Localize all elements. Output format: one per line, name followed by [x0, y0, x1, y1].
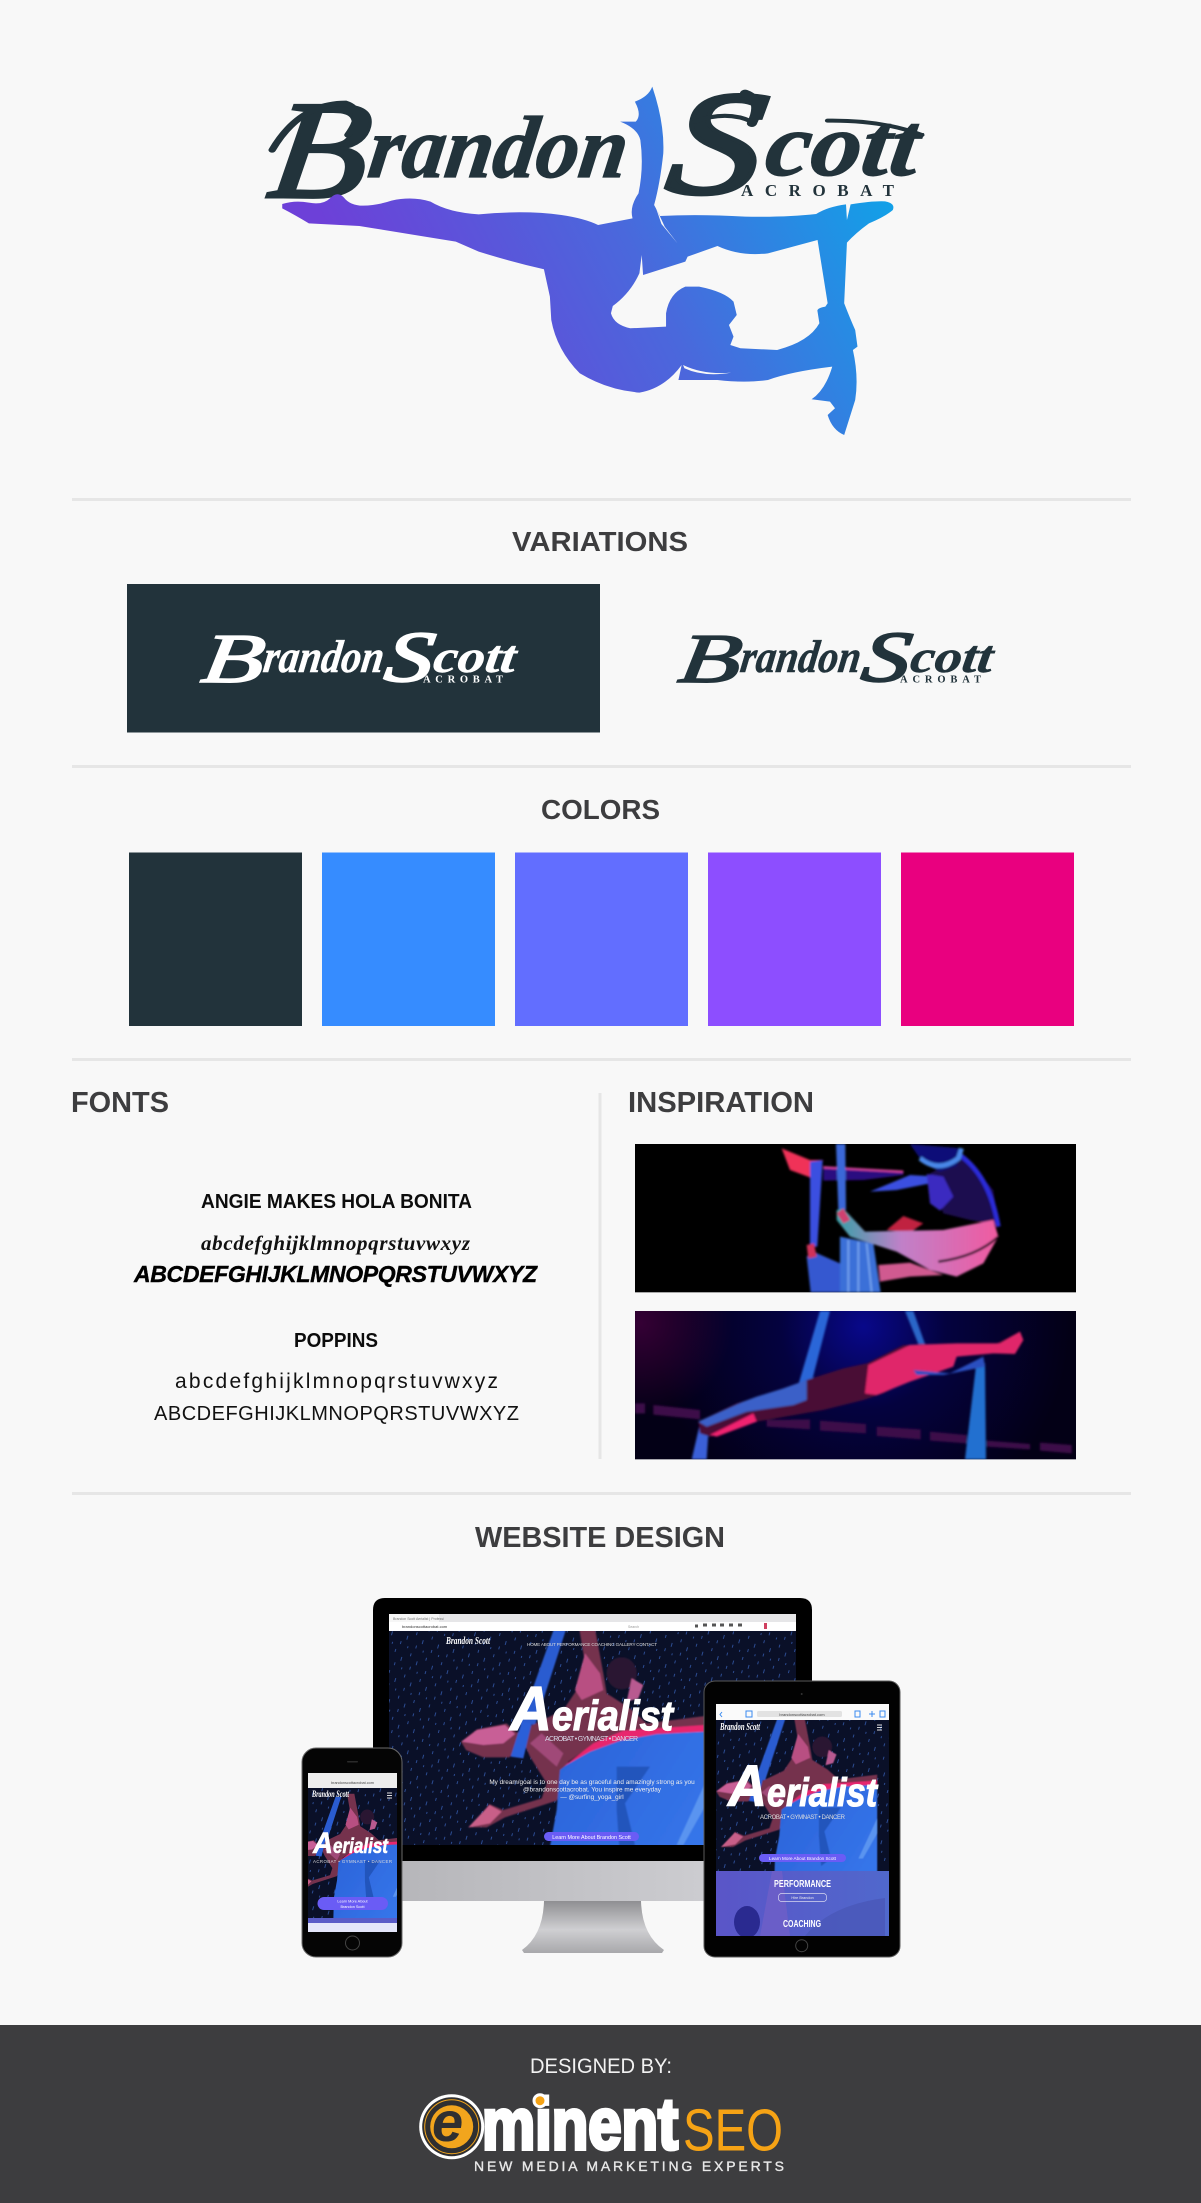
- tablet button: [759, 1854, 846, 1862]
- reversed wordmark: randon: [261, 631, 388, 682]
- tablet site logo: Brandon Scott: [719, 1722, 761, 1733]
- call to action button: [544, 1832, 639, 1841]
- reversed wordmark: B: [197, 620, 270, 698]
- Poppins lowercase sample: abcdefghijklmnopqrstuvwxyz: [175, 1370, 498, 1393]
- hero subtitle: ACROBAT • GYMNAST • DANCER: [545, 1736, 638, 1743]
- divider: [72, 1058, 1131, 1061]
- phone hero title: A: [312, 1827, 333, 1860]
- website hero: Learn More About Brandon Scott: [552, 1835, 631, 1841]
- tablet services section: [716, 1871, 889, 1938]
- logo orange dot: [532, 2093, 548, 2108]
- tablet: brandonscottacrobat.com: [779, 1712, 825, 1717]
- script lowercase sample: abcdefghijklmnopqrstuvwxyz: [201, 1231, 471, 1255]
- reversed tagline: ACROBAT: [423, 674, 503, 686]
- divider: [72, 1492, 1131, 1495]
- phone address bar: brandonscottacrobat.com: [331, 1781, 374, 1785]
- panel: fonts: [71, 1087, 538, 1425]
- browser chrome: brandonscottacrobat.com: [402, 1624, 448, 1629]
- panel: inspiration: [628, 1087, 1076, 1459]
- heading: fonts: FONTS: [71, 1087, 169, 1119]
- browser chrome: [389, 1614, 796, 1631]
- hero title: A: [508, 1675, 552, 1744]
- colour swatches: [129, 852, 1074, 1026]
- reversed wordmark: cott: [431, 631, 521, 682]
- site logo: Brandon Scott: [445, 1635, 491, 1647]
- hero title: erialist: [552, 1692, 675, 1739]
- tablet hero title: A: [726, 1754, 767, 1819]
- phone: [302, 1748, 402, 1958]
- phone home button: [346, 1936, 360, 1950]
- heading: inspiration: INSPIRATION: [628, 1087, 814, 1119]
- designer logo: [419, 2085, 784, 2174]
- coaching heading: COACHING: [783, 1919, 821, 1930]
- phone site logo: Brandon Scott: [311, 1789, 349, 1799]
- Poppins uppercase sample: ABCDEFGHIJKLMNOPQRSTUVWXYZ: [154, 1403, 519, 1425]
- logo wordmark: Scott: S: [659, 62, 776, 226]
- monitor chin: [373, 1858, 812, 1901]
- heading: variations: VARIATIONS: [512, 526, 688, 557]
- logo wordmark: e: [432, 2090, 463, 2153]
- designed by label: DESIGNED BY:: [530, 2055, 672, 2078]
- browser chrome: Brandon Scott Aerialist | Professi: [393, 1617, 444, 1621]
- tablet services section: Hire Brandon: [791, 1896, 814, 1900]
- footer: [0, 2025, 1201, 2203]
- phone toolbar: [308, 1918, 397, 1923]
- dark wordmark: B: [674, 620, 747, 698]
- primary logo: [261, 62, 934, 435]
- site navigation: HOME ABOUT PERFORMANCE COACHING GALLERY CONTACT: [527, 1642, 657, 1647]
- script uppercase sample: ABCDEFGHIJKLMNOPQRSTUVWXYZ: [133, 1261, 538, 1287]
- phone hero title: erialist: [333, 1835, 389, 1858]
- panel: dark logo on light: [674, 617, 1000, 698]
- tablet home button: [796, 1940, 808, 1952]
- tablet: [704, 1681, 900, 1957]
- phone hero: [308, 1788, 397, 1918]
- performance heading: PERFORMANCE: [774, 1879, 831, 1890]
- column divider: [598, 1093, 602, 1459]
- logo wordmark: Brandon: B: [261, 74, 381, 228]
- divider: [72, 765, 1131, 768]
- logo wordmark: SEO: [683, 2098, 783, 2164]
- logo wordmark: Scott: cott: [760, 94, 930, 195]
- testimonial quote: [489, 1779, 695, 1801]
- heading: website design: WEBSITE DESIGN: [475, 1522, 725, 1554]
- heading: colors: COLORS: [541, 794, 660, 825]
- logo wordmark: minent: [482, 2085, 678, 2165]
- testimonial quote: @brandonscottacrobat. You inspire me everyday: [523, 1786, 662, 1794]
- tablet hero: Learn More About Brandon Scott: [769, 1856, 837, 1861]
- device mockups: [293, 1598, 900, 1977]
- phone hero: Learn More About: [337, 1900, 369, 1904]
- phone hero: Brandon Scott: [340, 1905, 365, 1909]
- monitor stand: [522, 1901, 664, 1953]
- phone hero: ACROBAT • GYMNAST • DANCER: [313, 1859, 392, 1864]
- reversed wordmark: S: [380, 617, 440, 697]
- testimonial quote: — @surfing_yoga_girl: [560, 1794, 624, 1801]
- logo swashes: [272, 93, 922, 150]
- website hero: [389, 1631, 796, 1845]
- dark wordmark: randon: [738, 631, 865, 682]
- tablet hero: [716, 1720, 889, 1871]
- logo emblem: [419, 2094, 484, 2159]
- hire button: [778, 1894, 826, 1902]
- logo wordmark: Brandon: randon: [363, 99, 635, 197]
- testimonial quote: My dream/goal is to one day be as graceful and amazingly strong as you: [489, 1779, 695, 1786]
- dark tagline: ACROBAT: [900, 674, 981, 686]
- dark wordmark: S: [857, 617, 917, 697]
- logo tagline: NEW MEDIA MARKETING EXPERTS: [474, 2158, 784, 2174]
- logo tagline: ACROBAT: [741, 181, 895, 200]
- divider: [72, 498, 1131, 501]
- desktop monitor: [373, 1598, 812, 1977]
- acrobat silhouette: [282, 87, 893, 435]
- photo: aerialist stretched horizontally: [635, 1311, 1076, 1459]
- tablet browser bar: [716, 1704, 889, 1720]
- monitor bezel: [373, 1598, 812, 1861]
- browser chrome: Search: [628, 1625, 639, 1629]
- dark wordmark: cott: [908, 631, 998, 682]
- font name: Angie Makes Hola Bonita: ANGIE MAKES HOLA BONITA: [201, 1191, 472, 1213]
- tablet hero: ACROBAT • GYMNAST • DANCER: [760, 1815, 846, 1821]
- photo: aerialist curled in silks: [635, 1144, 1076, 1292]
- tablet hero title: erialist: [767, 1771, 878, 1815]
- panel: reversed logo on dark: [127, 584, 600, 732]
- font name: Poppins: POPPINS: [294, 1330, 378, 1352]
- phone button: [318, 1897, 388, 1910]
